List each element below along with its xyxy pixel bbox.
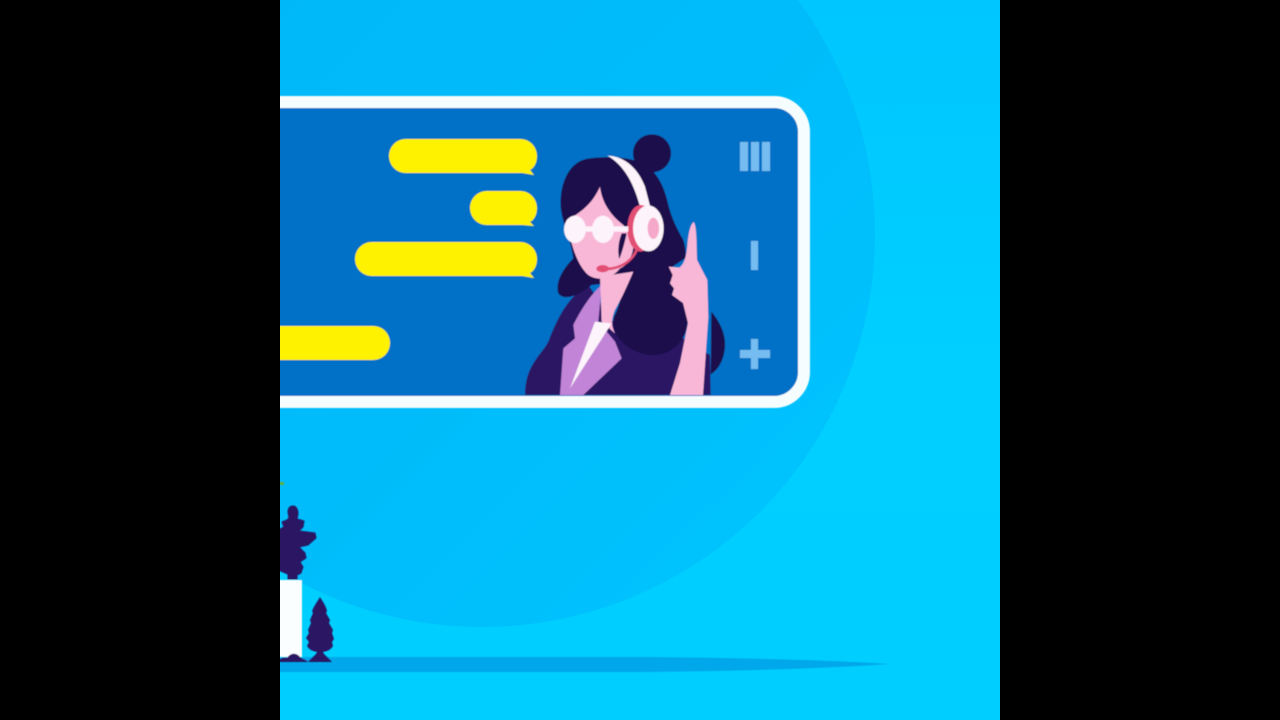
menu icon: plus	[740, 339, 770, 369]
plant: tall potted	[276, 482, 316, 662]
sky background	[280, 0, 1000, 720]
chat bubble 3	[355, 242, 537, 278]
chat bubble 1	[389, 139, 537, 175]
scene	[280, 0, 1000, 720]
menu icon: single bar	[751, 241, 758, 270]
face	[567, 187, 634, 279]
tall plant leaves	[278, 506, 316, 579]
glasses arm	[583, 226, 628, 232]
back hair	[558, 157, 688, 355]
hair right lower	[711, 312, 725, 374]
glasses lens right	[592, 216, 614, 243]
headset microphone	[607, 250, 637, 269]
phone panel	[280, 95, 811, 409]
plant: small leaf	[306, 597, 334, 662]
microphone tip	[596, 265, 609, 272]
headset band	[607, 156, 651, 208]
hand and arm	[669, 222, 708, 395]
sideburn	[618, 233, 627, 259]
chat bubble 4	[270, 326, 390, 360]
chat bubble 2	[470, 191, 537, 226]
white plant pot	[276, 580, 302, 657]
neck and chest	[600, 272, 633, 333]
pot base mound	[276, 654, 308, 662]
small plant base	[308, 650, 332, 662]
ground shadow	[275, 657, 889, 672]
large background circle	[280, 0, 875, 627]
headset ear cup back	[626, 204, 645, 252]
lapel	[560, 285, 622, 395]
plant tip	[279, 482, 284, 485]
menu icon: three bars	[740, 142, 770, 171]
hair bun	[633, 134, 671, 172]
character: support agent	[525, 134, 725, 395]
white shirt	[570, 322, 612, 388]
jacket	[525, 285, 711, 395]
small plant leaf	[306, 597, 334, 652]
panel screen frame	[280, 95, 811, 409]
glasses lens left	[564, 216, 586, 243]
ear cup center	[648, 218, 659, 239]
glasses	[564, 216, 628, 243]
illustration: customer support chat	[280, 0, 1000, 720]
headset ear cup front	[633, 205, 664, 251]
